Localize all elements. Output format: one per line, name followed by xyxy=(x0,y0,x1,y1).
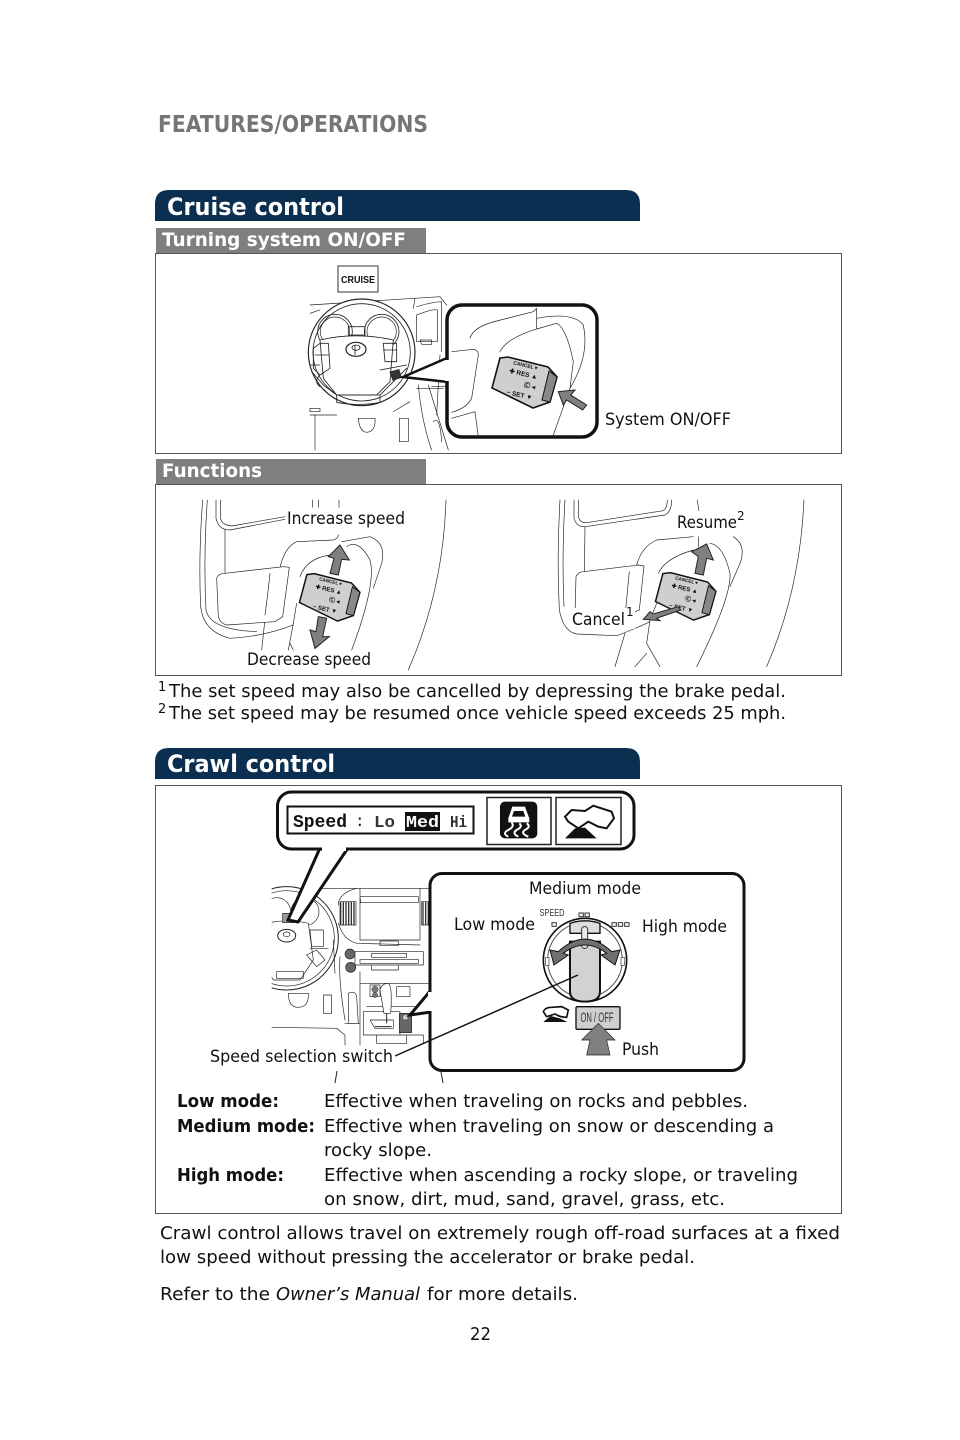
text block: crawl control description: low speed without pressing the accelerator or brake pedal. xyxy=(160,1247,695,1268)
callout: speed selector switch: ON / OFF xyxy=(580,1009,614,1025)
icon: stalk switch: − SET ▼ xyxy=(668,603,693,615)
text block: mode descriptions: Effective when ascending a rocky slope, or traveling xyxy=(324,1165,798,1186)
text block: mode descriptions: Effective when traveling on snow or descending a xyxy=(324,1116,774,1137)
panel: functions xyxy=(156,484,842,676)
text block: mode descriptions: Effective when traveling on rocks and pebbles. xyxy=(324,1091,748,1112)
footnotes: The set speed may also be cancelled by depressing the brake pedal. xyxy=(168,681,786,702)
icon: cruise button: CRUISE xyxy=(341,274,375,286)
text block: mode descriptions: rocky slope. xyxy=(324,1140,432,1161)
icon: stalk switch: ✚ RES ▲ xyxy=(315,583,342,596)
icon: stalk switch: − SET ▼ xyxy=(506,389,533,402)
icon: stalk switch xyxy=(655,573,716,620)
text block: owner's manual reference: for more details. xyxy=(427,1284,578,1305)
label: increase speed: Increase speed xyxy=(287,509,405,529)
label: low mode: Low mode xyxy=(454,915,535,935)
page number: 22 xyxy=(470,1324,491,1345)
label: resume: Resume xyxy=(677,513,737,533)
heading: crawl control xyxy=(155,748,640,779)
text block: crawl control description: Crawl control allows travel on extremely rough off-road surfaces at a fixed xyxy=(160,1223,840,1244)
icon: stalk switch: Ⓒ ◂ xyxy=(523,380,537,391)
icon: traction skid xyxy=(487,798,551,844)
illustration: crawl dashboard xyxy=(272,886,428,1046)
text block: owner's manual reference: Refer to the xyxy=(160,1284,270,1305)
text block: owner's manual reference: Owner’s Manual xyxy=(276,1284,420,1305)
heading: cruise control xyxy=(155,190,640,221)
text block: mode descriptions: on snow, dirt, mud, sand, gravel, grass, etc. xyxy=(324,1189,725,1210)
multi-information display text xyxy=(288,806,474,834)
icon: stalk switch: Ⓒ ◂ xyxy=(684,594,697,605)
label: cancel: 1 xyxy=(626,605,634,619)
callout: speed selector switch xyxy=(410,874,744,1070)
icon: cruise button xyxy=(338,266,378,292)
text block: owner's manual reference xyxy=(160,1284,578,1305)
callout: speed selector switch: SPEED xyxy=(540,908,564,919)
label: medium mode: Medium mode xyxy=(529,879,641,899)
icon: speed dial xyxy=(543,918,627,1002)
icon: crawl vehicle on rock xyxy=(556,798,621,844)
illustration: dashboard and steering wheel xyxy=(308,297,448,450)
label: speed selection switch: Speed selection switch xyxy=(210,1047,393,1067)
icon: speed indicators xyxy=(552,913,629,926)
footnotes xyxy=(158,680,786,724)
multi-information display text: Speed xyxy=(293,813,347,833)
subheading: functions: Functions xyxy=(162,460,262,482)
panel: crawl control xyxy=(156,786,842,1214)
icon: stalk switch: Ⓒ ◂ xyxy=(328,595,341,606)
illustration: resume and cancel xyxy=(558,500,804,667)
text block: mode descriptions: Medium mode: xyxy=(177,1116,315,1137)
multi-information display text: : xyxy=(355,813,365,831)
icon: stalk switch: CANCEL ▾ xyxy=(319,577,343,587)
illustration: speed up and down xyxy=(200,500,446,670)
callout: stalk close-up xyxy=(403,305,597,437)
footnotes: 2 xyxy=(158,702,166,717)
multi-information display text: Hi xyxy=(450,814,467,833)
label: high mode: High mode xyxy=(642,917,727,937)
multi-information display text: Lo xyxy=(374,814,395,833)
icon: stalk switch xyxy=(299,574,360,621)
arrow: press cruise button xyxy=(558,390,587,410)
panel: turning system on/off xyxy=(156,254,842,454)
icon: crawl mode symbol xyxy=(543,1007,568,1022)
label: resume: 2 xyxy=(737,509,745,523)
arrow: push xyxy=(582,1023,615,1055)
icon: stalk switch: ✚ RES ▲ xyxy=(671,582,698,595)
icon: stalk switch: CANCEL ▾ xyxy=(675,576,699,586)
text block: mode descriptions xyxy=(177,1091,798,1210)
button: on/off xyxy=(576,1007,620,1029)
multi-information display text: Med xyxy=(406,814,439,833)
heading: cruise control: Cruise control xyxy=(167,193,344,221)
footnotes: The set speed may be resumed once vehicle speed exceeds 25 mph. xyxy=(168,703,786,724)
arrow: cancel xyxy=(643,607,681,621)
leader line: speed selection switch xyxy=(395,975,578,1056)
label: decrease speed: Decrease speed xyxy=(247,650,371,670)
callout: display readout xyxy=(278,792,634,922)
subheading: turning system: Turning system ON/OFF xyxy=(162,229,406,251)
text block: mode descriptions: High mode: xyxy=(177,1165,284,1186)
subheading: functions xyxy=(156,459,426,484)
text block: crawl control description xyxy=(160,1223,840,1268)
icon: stalk switch xyxy=(492,357,557,408)
heading: crawl control: Crawl control xyxy=(167,750,335,778)
footnotes: 1 xyxy=(158,680,166,695)
label: system on/off: System ON/OFF xyxy=(605,410,731,430)
label: push: Push xyxy=(622,1040,659,1060)
label: cancel: Cancel xyxy=(572,610,625,630)
icon: stalk switch: − SET ▼ xyxy=(312,604,337,616)
text block: mode descriptions: Low mode: xyxy=(177,1091,279,1112)
icon: stalk switch: CANCEL ▾ xyxy=(513,360,538,372)
icon: stalk switch: ✚ RES ▲ xyxy=(508,367,538,381)
page heading: FEATURES/OPERATIONS xyxy=(158,112,428,138)
